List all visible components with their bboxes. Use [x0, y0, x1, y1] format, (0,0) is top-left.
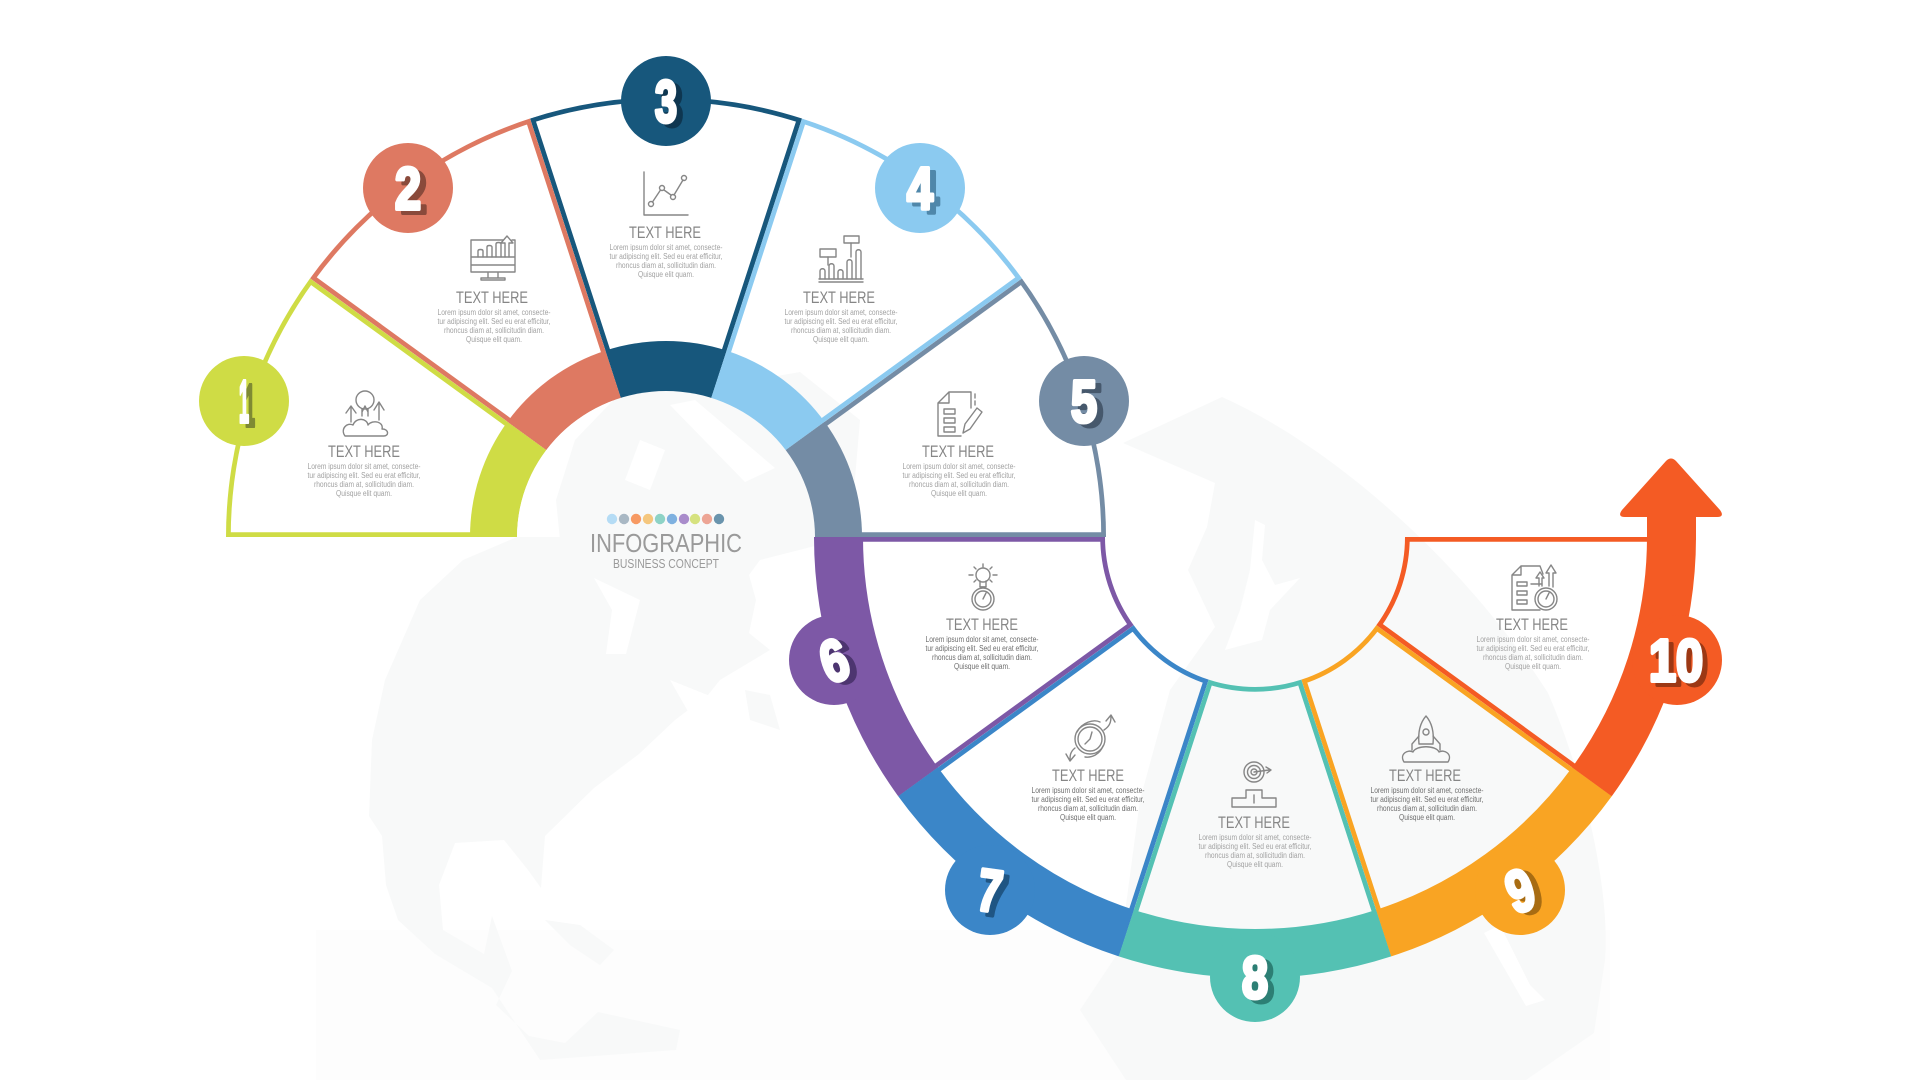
- number 3: 3: [661, 73, 683, 139]
- panel: step 1: [199, 278, 546, 537]
- text block 6: rhoncus diam at, sollicitudin diam.: [932, 653, 1032, 662]
- text block 7: rhoncus diam at, sollicitudin diam.: [1038, 804, 1138, 813]
- heading 4: TEXT HERE: [803, 288, 875, 307]
- text block 3: tur adipiscing elit. Sed eu erat efficitur,: [610, 252, 722, 261]
- colour dots: [607, 514, 724, 524]
- wedge outline 3: [530, 99, 802, 398]
- heading 2: TEXT HERE: [456, 288, 528, 307]
- text block 2: [438, 308, 551, 344]
- number 3: 3: [655, 69, 677, 135]
- text block 1: [308, 462, 421, 498]
- icon: rocket and cloud: [1403, 716, 1449, 762]
- badge circle 8: [1210, 932, 1300, 1022]
- number 7: 7: [973, 857, 1006, 925]
- number 2: 2: [401, 160, 427, 226]
- number 7: 7: [979, 861, 1012, 930]
- panel: step 10: [1376, 458, 1722, 796]
- number 9: 9: [1498, 856, 1543, 926]
- number 9: 9: [1505, 857, 1550, 928]
- text block 8: [1198, 833, 1312, 869]
- badge circle 6: [789, 615, 879, 705]
- heading 3: TEXT HERE: [629, 223, 701, 242]
- panel: step 8: [1118, 680, 1392, 1022]
- text block 7: [1032, 786, 1145, 822]
- centre cut-out of upper semicircle: [517, 391, 815, 537]
- wedge and band 7: [898, 625, 1209, 956]
- heading 9: TEXT HERE: [1389, 766, 1461, 785]
- text block 6: [926, 635, 1039, 671]
- number 10: 10: [1649, 628, 1703, 694]
- text block 2: Quisque elit quam.: [466, 335, 522, 344]
- wedge outline 2: [310, 118, 621, 450]
- text block 2: tur adipiscing elit. Sed eu erat efficitur,: [438, 317, 550, 326]
- text block 7: tur adipiscing elit. Sed eu erat efficitur,: [1032, 795, 1144, 804]
- arrow head: [1620, 458, 1722, 540]
- heading 1: TEXT HERE: [328, 442, 400, 461]
- icon: target and podium: [1232, 762, 1276, 807]
- text block 1: Quisque elit quam.: [336, 489, 392, 498]
- panel: step 1: 1: [239, 369, 249, 435]
- wedge and band 10: [1376, 537, 1696, 796]
- text block 10: [1476, 635, 1590, 671]
- text block 6: Quisque elit quam.: [954, 662, 1010, 671]
- panel: step 9: [1302, 625, 1612, 956]
- text block 5: Quisque elit quam.: [931, 489, 987, 498]
- text block 8: Lorem ipsum dolor sit amet, consecte-: [1198, 833, 1312, 842]
- text block 3: Quisque elit quam.: [638, 270, 694, 279]
- number 1: [239, 369, 255, 439]
- number 4: 4: [907, 156, 933, 222]
- wedge outline 5: [786, 278, 1106, 537]
- icon: document with clock and arrows: [1512, 565, 1557, 610]
- text block 5: [902, 462, 1016, 498]
- text block 5: Lorem ipsum dolor sit amet, consecte-: [902, 462, 1016, 471]
- icon: clock with arrows: [1066, 715, 1115, 761]
- wedge and band 6: [814, 537, 1134, 796]
- badge circle 2: [363, 143, 453, 233]
- text block 9: Lorem ipsum dolor sit amet, consecte-: [1370, 786, 1484, 795]
- icon: monitor with rising bars: [471, 236, 515, 280]
- text block 2: rhoncus diam at, sollicitudin diam.: [444, 326, 544, 335]
- text block 6: Lorem ipsum dolor sit amet, consecte-: [926, 635, 1039, 644]
- badge circle 3: [621, 56, 711, 146]
- text block 2: Lorem ipsum dolor sit amet, consecte-: [438, 308, 551, 317]
- centre title block: [590, 514, 742, 571]
- text block 7: Lorem ipsum dolor sit amet, consecte-: [1032, 786, 1145, 795]
- text block 3: [610, 243, 723, 279]
- text block 1: tur adipiscing elit. Sed eu erat efficitur,: [308, 471, 420, 480]
- text block 4: Lorem ipsum dolor sit amet, consecte-: [784, 308, 898, 317]
- title: INFOGRAPHIC: [590, 528, 742, 558]
- panel: step 3: [530, 56, 802, 398]
- text block 1: rhoncus diam at, sollicitudin diam.: [314, 480, 414, 489]
- panel: step 2: [310, 118, 621, 450]
- text block 9: Quisque elit quam.: [1399, 813, 1455, 822]
- text block 4: Quisque elit quam.: [813, 335, 869, 344]
- panel: step 4: [711, 118, 1022, 450]
- number 5: 5: [1071, 369, 1097, 435]
- wedge and band 9: [1302, 625, 1612, 956]
- text block 8: Quisque elit quam.: [1227, 860, 1283, 869]
- icon: document and pencil: [938, 392, 982, 436]
- text block 8: tur adipiscing elit. Sed eu erat efficitur,: [1198, 842, 1312, 851]
- badge circle 1: [199, 356, 289, 446]
- text block 5: rhoncus diam at, sollicitudin diam.: [909, 480, 1009, 489]
- heading 10: TEXT HERE: [1496, 615, 1568, 634]
- badge circle 10: [1632, 615, 1722, 705]
- panel: step 7: [898, 625, 1209, 956]
- text block 4: [784, 308, 898, 344]
- badge circle 9: [1475, 845, 1565, 935]
- badge circle 4: [875, 143, 965, 233]
- heading 6: TEXT HERE: [946, 615, 1018, 634]
- wedge outline 1: [226, 278, 546, 537]
- number 10: 10: [1654, 632, 1708, 698]
- text block 10: rhoncus diam at, sollicitudin diam.: [1483, 653, 1583, 662]
- text block 7: Quisque elit quam.: [1060, 813, 1116, 822]
- text block 9: [1370, 786, 1484, 822]
- text block 9: tur adipiscing elit. Sed eu erat efficitur,: [1370, 795, 1484, 804]
- number 6: 6: [812, 626, 857, 696]
- text block 1: Lorem ipsum dolor sit amet, consecte-: [308, 462, 421, 471]
- number 8: 8: [1248, 949, 1274, 1015]
- text block 5: tur adipiscing elit. Sed eu erat efficitur,: [902, 471, 1016, 480]
- icon: light bulb and clock: [969, 564, 997, 610]
- heading 5: TEXT HERE: [922, 442, 994, 461]
- number 5: 5: [1077, 373, 1103, 439]
- badge circle 5: [1039, 356, 1129, 446]
- badge circle 7: [945, 845, 1035, 935]
- icon: magnifier and clouds: [343, 391, 388, 436]
- text block 8: rhoncus diam at, sollicitudin diam.: [1205, 851, 1305, 860]
- text block 3: rhoncus diam at, sollicitudin diam.: [616, 261, 716, 270]
- text block 4: tur adipiscing elit. Sed eu erat efficitur,: [784, 317, 898, 326]
- heading 8: TEXT HERE: [1218, 813, 1290, 832]
- number 4: 4: [913, 160, 939, 226]
- panel: step 5: [786, 278, 1129, 537]
- text block 10: tur adipiscing elit. Sed eu erat efficitur,: [1476, 644, 1590, 653]
- background world map: [316, 372, 1610, 1080]
- panel: step 6: [789, 537, 1134, 796]
- number 8: 8: [1242, 945, 1268, 1011]
- number 2: 2: [395, 156, 421, 222]
- panel: step 1: 1: [245, 373, 255, 439]
- text block 10: Lorem ipsum dolor sit amet, consecte-: [1476, 635, 1590, 644]
- wedge and band 8: [1118, 680, 1392, 976]
- text block 9: rhoncus diam at, sollicitudin diam.: [1377, 804, 1477, 813]
- icon: bar chart with labels: [819, 236, 863, 282]
- heading 7: TEXT HERE: [1052, 766, 1124, 785]
- icon: line chart: [644, 172, 688, 215]
- number 6: 6: [819, 627, 864, 698]
- text block 4: rhoncus diam at, sollicitudin diam.: [791, 326, 891, 335]
- subtitle: BUSINESS CONCEPT: [613, 557, 719, 571]
- text block 3: Lorem ipsum dolor sit amet, consecte-: [610, 243, 723, 252]
- wedge outline 4: [711, 118, 1022, 450]
- text block 10: Quisque elit quam.: [1505, 662, 1561, 671]
- text block 6: tur adipiscing elit. Sed eu erat efficitur,: [926, 644, 1038, 653]
